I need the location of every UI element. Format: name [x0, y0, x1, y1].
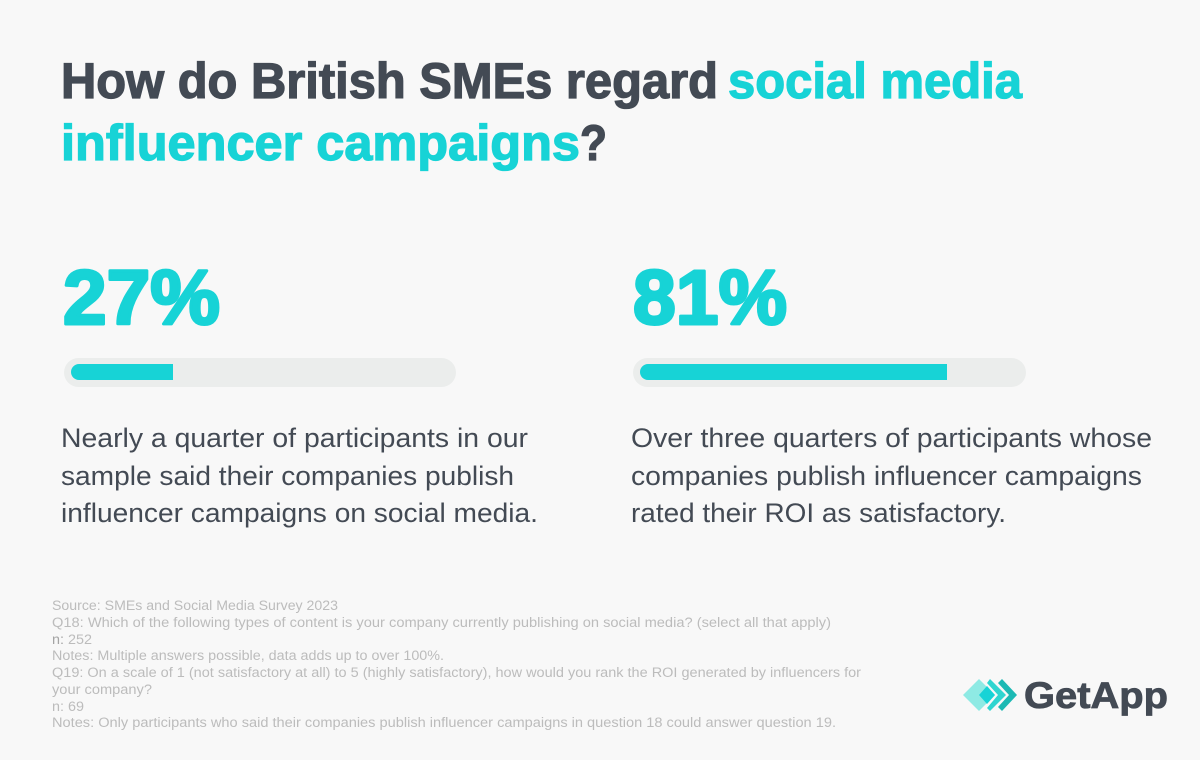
source notes: n: 69 [52, 699, 84, 714]
source notes: Notes: Multiple answers possible, data adds up to over 100%. [52, 648, 444, 663]
source notes: Notes: Only participants who said their companies publish influencer campaigns in question 18 could answer question 19. [52, 715, 836, 730]
description: 81%: rated their ROI as satisfactory. [631, 498, 1006, 528]
icon: GetApp chevrons [963, 679, 1017, 711]
source notes [52, 598, 862, 730]
description: 27% [61, 423, 538, 528]
description: 27%: sample said their companies publish [61, 461, 514, 491]
source notes: n: 252 [52, 632, 92, 647]
title [61, 53, 1023, 171]
source notes: your company? [52, 682, 152, 697]
description: 27%: influencer campaigns on social media. [61, 498, 538, 528]
logo: GetApp [963, 675, 1168, 716]
title: influencer campaigns [61, 115, 580, 171]
big number: 81%: 81% [633, 255, 787, 341]
description: 81%: companies publish influencer campaigns [631, 461, 1142, 491]
title: How do British SMEs regard [61, 53, 718, 109]
title: social media [728, 53, 1023, 109]
progress bar: 81% [633, 358, 1026, 387]
source notes: Q19: On a scale of 1 (not satisfactory at all) to 5 (highly satisfactory), how would you rank the ROI generated by influencers for [52, 665, 862, 680]
big number: 27%: 27% [63, 255, 220, 341]
title: ? [580, 115, 607, 171]
description: 27%: Nearly a quarter of participants in our [61, 423, 528, 453]
progress bar: 27% [64, 358, 456, 387]
panel: 27 percent stat [61, 255, 538, 528]
source notes: Source: SMEs and Social Media Survey 2023 [52, 598, 338, 613]
wordmark: GetApp [1024, 675, 1168, 716]
source notes: Q18: Which of the following types of content is your company currently publishing on social media? (select all that apply) [52, 615, 831, 630]
panel: 81 percent stat [631, 255, 1152, 528]
description: 81%: Over three quarters of participants whose [631, 423, 1152, 453]
description: 81% [631, 423, 1152, 528]
